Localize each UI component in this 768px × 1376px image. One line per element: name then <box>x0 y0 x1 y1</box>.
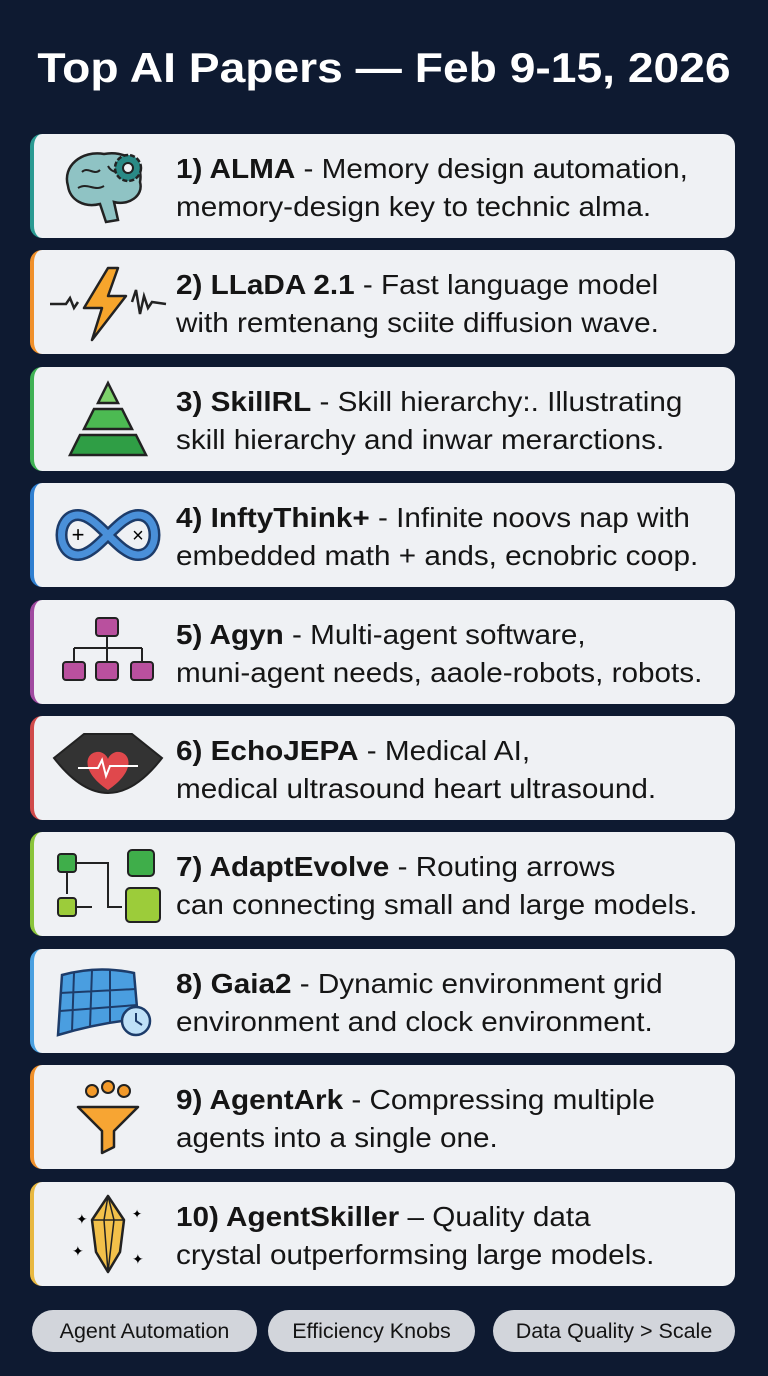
icon: pyramid <box>68 380 148 456</box>
card 5: Agyn <box>30 600 735 704</box>
text: 3) SkillRL - Skill hierarchy:. Illustrating <box>176 386 682 417</box>
text: embedded math + ands, ecnobric coop. <box>176 540 698 571</box>
card 7: AdaptEvolve <box>30 832 735 936</box>
card 8: Gaia2 <box>30 949 735 1053</box>
text <box>176 735 656 804</box>
card 3: SkillRL <box>30 367 735 471</box>
icon: funnel with people <box>76 1080 140 1154</box>
icon: grid and clock <box>56 968 152 1037</box>
text: 8) Gaia2 - Dynamic environment grid <box>176 968 663 999</box>
title: Top AI Papers — Feb 9-15, 2026 <box>37 44 731 91</box>
text <box>176 386 682 455</box>
pill: Agent Automation: Agent Automation <box>60 1319 229 1343</box>
icon: crystal: ✦ <box>72 1243 84 1259</box>
card 2: LLaDA <box>30 250 735 354</box>
icon: routing boxes <box>57 849 161 923</box>
text <box>176 619 702 688</box>
text: medical ultrasound heart ultrasound. <box>176 773 656 804</box>
icon: brain with gear <box>66 152 142 224</box>
text: 10) AgentSkiller – Quality data <box>176 1201 591 1232</box>
icon: crystal: ✦ <box>132 1207 142 1221</box>
text: can connecting small and large models. <box>176 889 697 920</box>
pill: Efficiency Knobs <box>268 1310 475 1352</box>
card 10: AgentSkiller <box>30 1182 735 1286</box>
pill: Data Quality > Scale: Data Quality > Scale <box>516 1319 712 1343</box>
text: agents into a single one. <box>176 1122 498 1153</box>
text: 2) LLaDA 2.1 - Fast language model <box>176 269 658 300</box>
text: 4) InftyThink+ - Infinite noovs nap with <box>176 502 690 533</box>
text: environment and clock environment. <box>176 1006 653 1037</box>
icon: robot tree <box>62 617 154 681</box>
text: 6) EchoJEPA - Medical AI, <box>176 735 530 766</box>
icon: crystal <box>72 1194 144 1274</box>
text <box>176 851 697 920</box>
card 1: ALMA <box>30 134 735 238</box>
text: 9) AgentArk - Compressing multiple <box>176 1084 655 1115</box>
icon: lightning wave <box>50 266 166 342</box>
text: 7) AdaptEvolve - Routing arrows <box>176 851 615 882</box>
pill: Efficiency Knobs: Efficiency Knobs <box>292 1319 451 1343</box>
text: skill hierarchy and inwar merarctions. <box>176 424 664 455</box>
text <box>176 502 698 571</box>
card 4: InftyThink+ <box>30 483 735 587</box>
pill: Data Quality > Scale <box>493 1310 735 1352</box>
text <box>176 968 663 1037</box>
pill: Agent Automation <box>32 1310 257 1352</box>
text: 1) ALMA - Memory design automation, <box>176 153 688 184</box>
text <box>176 269 659 338</box>
icon: infinity: + <box>72 522 84 547</box>
icon: crystal: ✦ <box>132 1251 144 1267</box>
card 9: AgentArk <box>30 1065 735 1169</box>
card 6: EchoJEPA <box>30 716 735 820</box>
icon: infinity <box>56 509 160 561</box>
text <box>176 1084 655 1153</box>
text <box>176 153 688 222</box>
text <box>176 1201 654 1270</box>
icon: ultrasound heart <box>52 733 164 794</box>
text: with remtenang sciite diffusion wave. <box>176 307 659 338</box>
text: muni-agent needs, aaole-robots, robots. <box>176 657 702 688</box>
text: memory-design key to technic alma. <box>176 191 651 222</box>
text: 5) Agyn - Multi-agent software, <box>176 619 586 650</box>
icon: crystal: ✦ <box>76 1211 88 1227</box>
icon: infinity: × <box>132 525 144 547</box>
text: crystal outperformsing large models. <box>176 1239 654 1270</box>
